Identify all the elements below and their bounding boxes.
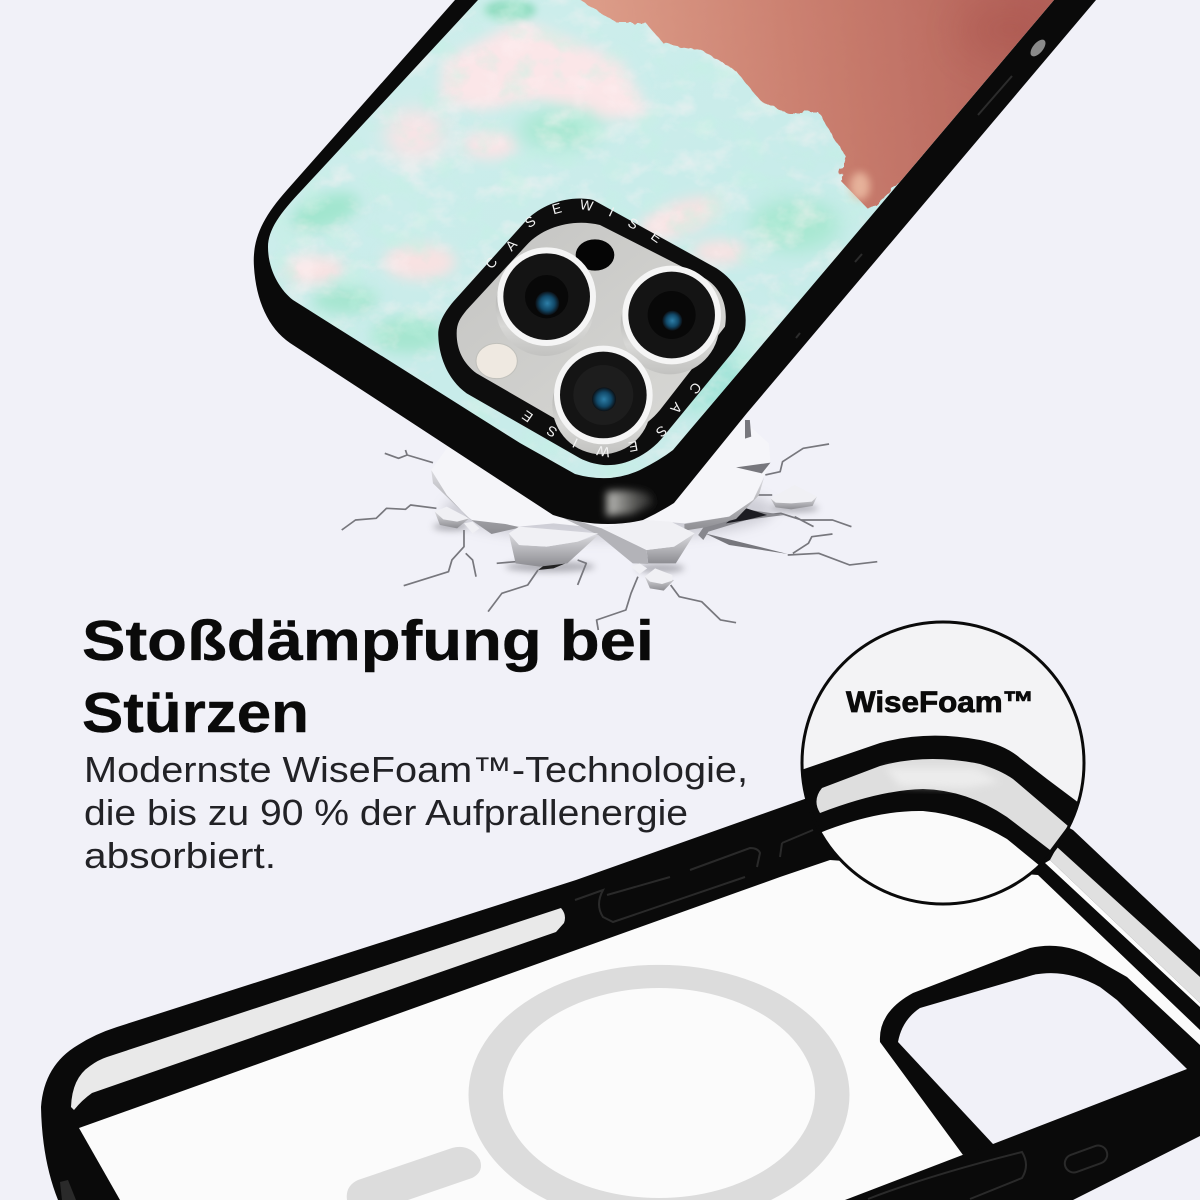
foam strip: right: [1050, 847, 1200, 1003]
ring lettering: E: [627, 438, 639, 455]
ring lettering: C: [482, 254, 500, 272]
ring lettering: I: [606, 204, 617, 220]
ring lettering: C: [686, 379, 705, 397]
flash: [476, 343, 517, 379]
ring lettering: A: [667, 400, 686, 418]
body text: Modernste WiseFoam™-Technologie,: [84, 749, 748, 790]
ring lettering: E: [550, 199, 563, 217]
crack wedges: [538, 420, 788, 570]
ring lettering: E: [648, 227, 665, 246]
side buttons: [796, 76, 1012, 338]
port slot at corner: [60, 1180, 76, 1200]
camera ring: [438, 199, 746, 465]
lower side button and port: [868, 1143, 1110, 1199]
camera cutout opening: [898, 973, 1187, 1144]
lens: right: [621, 266, 721, 374]
illustration: cracked wall impact: [342, 420, 877, 630]
bumper highlight: [606, 490, 654, 516]
magnifier callout: WiseFoam: [800, 620, 1086, 906]
button gloss: [1028, 37, 1048, 59]
ring lettering: E: [519, 407, 536, 426]
clear back panel: [79, 860, 1200, 1200]
heading: Stürzen: [82, 681, 309, 745]
magnifier label: WiseFoam™: [846, 686, 1034, 719]
side buttons: [575, 830, 813, 922]
lens: top left: [496, 247, 596, 356]
body text: die bis zu 90 % der Aufprallenergie: [84, 792, 688, 833]
heading: Stoßdämpfung bei: [82, 609, 654, 673]
peach tip of paint: [850, 172, 870, 200]
heading: [82, 609, 654, 745]
salmon paint: [580, 0, 1054, 208]
ring lettering: S: [522, 212, 538, 231]
ring lettering: S: [653, 422, 670, 441]
ring lettering: S: [625, 214, 641, 233]
body text: absorbiert.: [84, 835, 276, 876]
ring lettering: [482, 196, 705, 461]
MagSafe alignment bar: [347, 1147, 481, 1200]
fragment shadows: [433, 504, 819, 573]
frame outer silhouette: [41, 790, 1200, 1200]
camera cutout frame: [880, 946, 1200, 1155]
bottom phone case (clear with black frame): [41, 790, 1200, 1200]
top phone with case: [240, 0, 1100, 524]
camera plateau: [457, 223, 726, 437]
ring lettering: W: [579, 196, 595, 214]
printed back art: [268, 0, 1054, 478]
ring lettering: A: [502, 236, 521, 254]
lens: bottom: [552, 346, 653, 454]
wall fragments: [435, 485, 817, 584]
MagSafe ring: [469, 965, 850, 1200]
foam strip: left: [71, 908, 565, 1110]
wall plate edges: [431, 470, 817, 591]
camera module: [438, 196, 746, 465]
hairline between strip and rail: [1045, 860, 1200, 1007]
magnifier lens fill: [802, 622, 1084, 904]
case bumper: [254, 0, 1096, 524]
magnified frame detail: [804, 736, 1077, 865]
ring lettering: I: [570, 435, 580, 451]
ring lettering: S: [544, 422, 560, 441]
microphone hole: [576, 239, 614, 271]
magnifier outline: [802, 622, 1084, 904]
body text: [84, 749, 748, 876]
ring lettering: W: [595, 442, 611, 461]
